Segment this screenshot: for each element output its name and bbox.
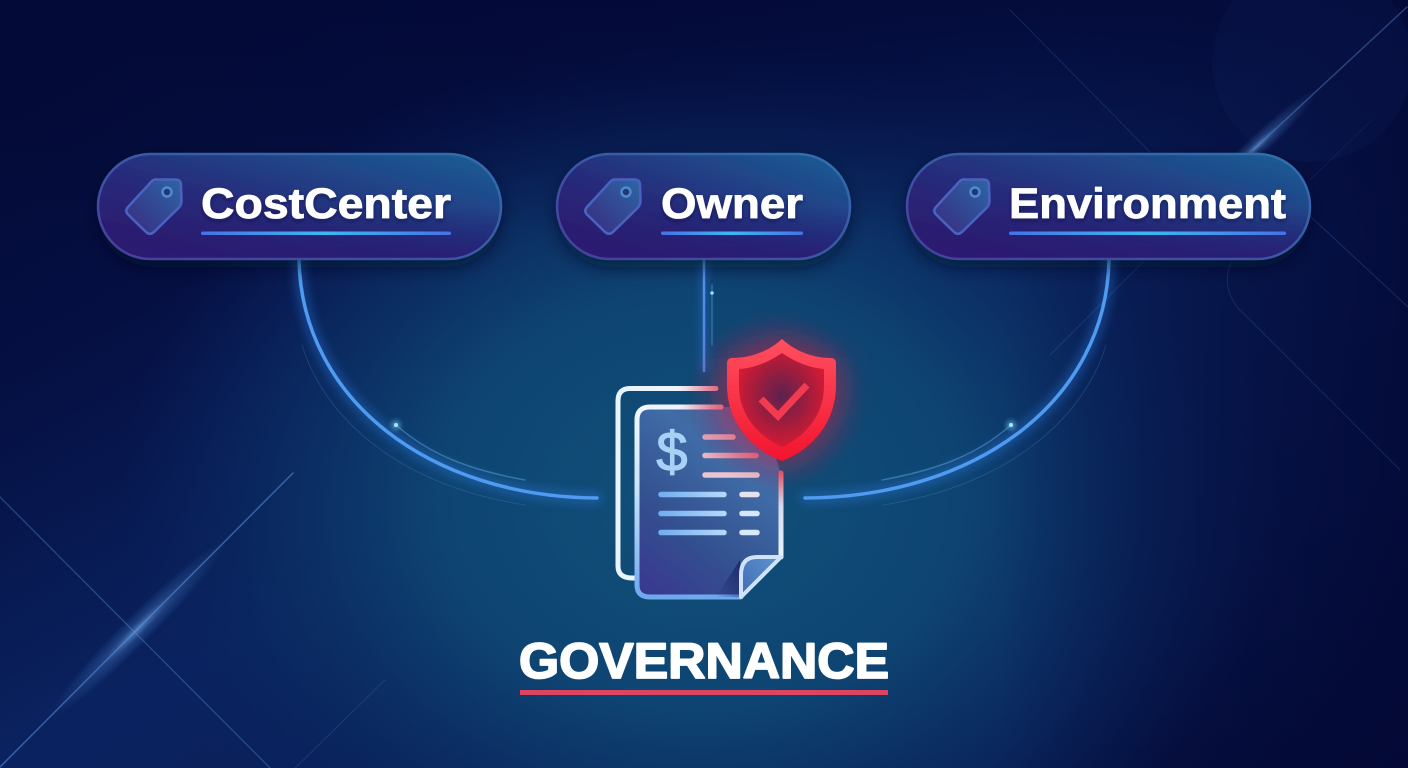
connector: CostCenter to document <box>299 260 597 505</box>
label: Owner: Owner <box>661 180 803 228</box>
icon: billing documents <box>618 388 781 597</box>
label: Environment: Environment <box>1009 180 1286 228</box>
underline <box>661 232 803 235</box>
label: CostCenter: CostCenter <box>201 180 451 228</box>
connector: Owner to document <box>699 260 714 371</box>
title: GOVERNANCE: GOVERNANCE <box>519 633 889 689</box>
folded corner <box>716 557 781 597</box>
icon: red security shield <box>687 312 863 488</box>
icon: price tag <box>126 180 182 234</box>
check mark <box>761 385 807 416</box>
connector: Environment to document <box>805 260 1109 505</box>
dollar sign: $ <box>656 420 688 483</box>
icon: price tag <box>934 180 990 234</box>
front page <box>637 407 781 597</box>
tag pill: CostCenter <box>98 154 501 259</box>
underline <box>1009 232 1286 235</box>
back page <box>618 388 716 578</box>
tag pill: Owner <box>557 154 850 259</box>
underline <box>201 232 451 235</box>
icon: price tag <box>585 180 640 234</box>
title underline <box>520 690 888 695</box>
tag pill: Environment <box>907 154 1310 259</box>
text lines <box>661 437 757 532</box>
